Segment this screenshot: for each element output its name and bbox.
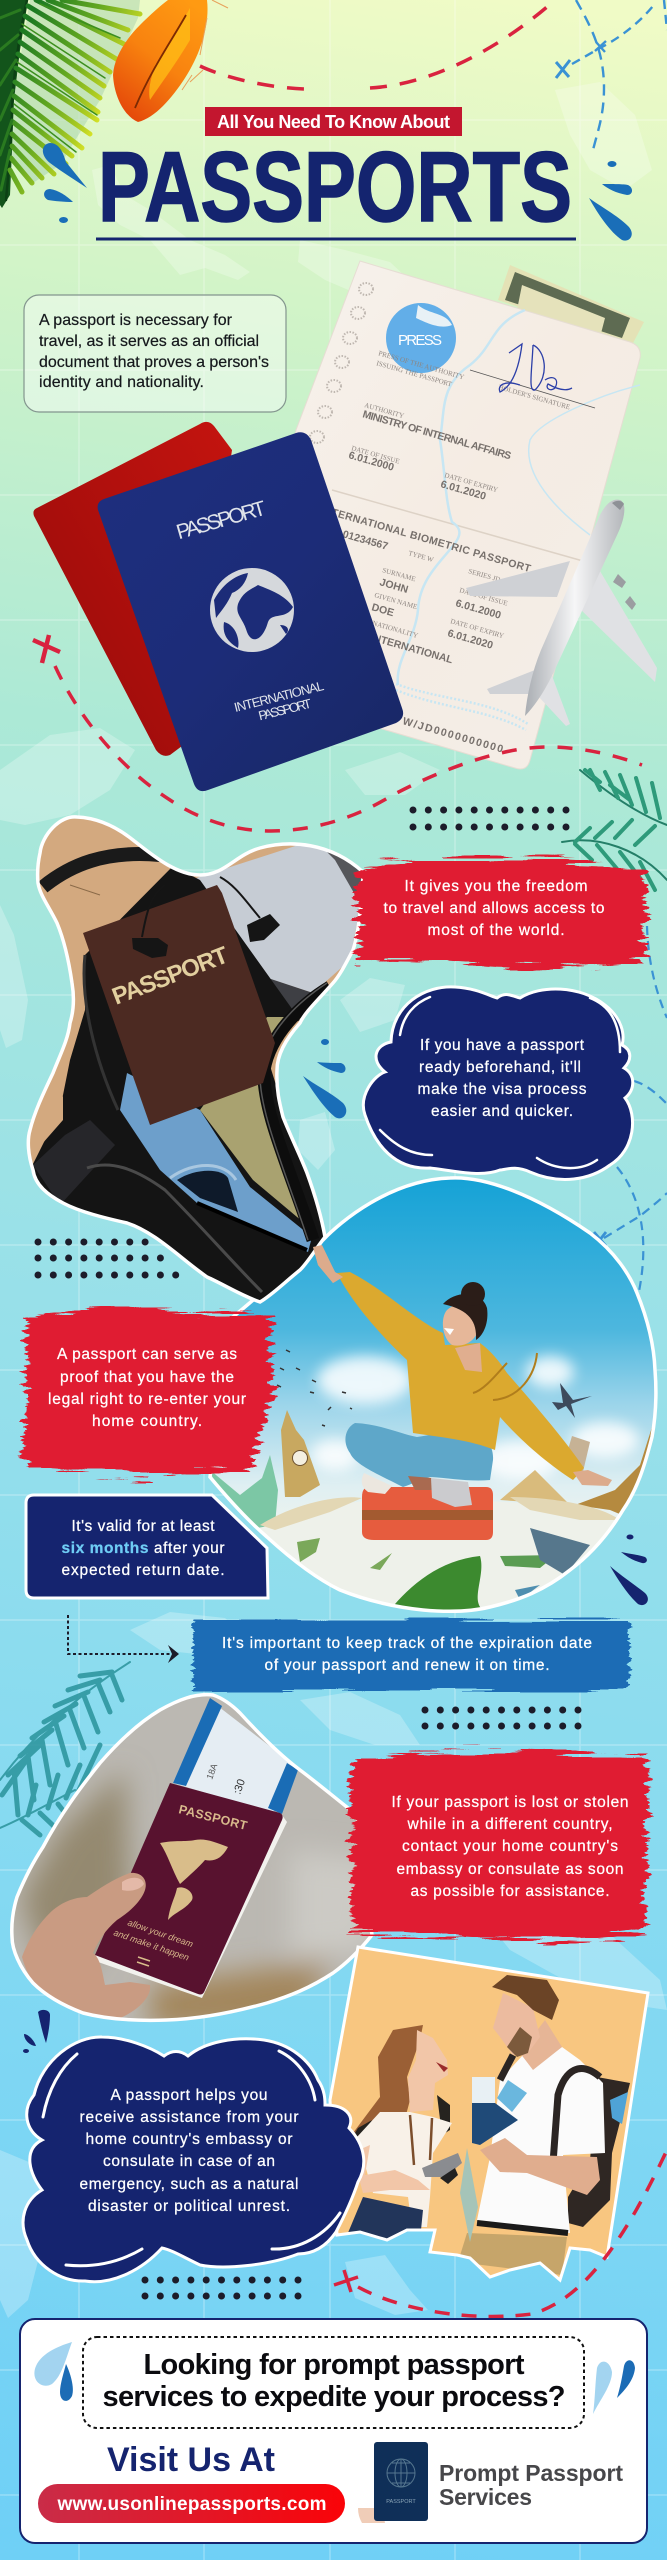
hands xyxy=(315,1254,343,1283)
callout: embassy assistance cloud: A passport helps you xyxy=(110,2087,268,2104)
passport printed details: 6.01.2020 xyxy=(439,478,488,503)
photo: hand holding maroon passport xyxy=(0,1690,380,2030)
icon: maroon passport xyxy=(95,1783,287,1998)
passport stamp: press globe xyxy=(386,303,456,373)
passport printed details: DOE xyxy=(370,601,395,619)
woman's jeans xyxy=(345,2197,423,2240)
passport printed details: AUTHORITY xyxy=(363,401,405,420)
blue dashed flight path top right xyxy=(556,0,667,150)
woman's hair xyxy=(353,2025,423,2143)
icon: airplane xyxy=(466,500,657,726)
passport page watermark rivers xyxy=(396,310,640,730)
logo: passport icon xyxy=(358,2442,428,2523)
icon: earphones xyxy=(132,877,280,958)
icon: silver globe xyxy=(210,568,294,652)
red X and dashed flight path lower xyxy=(33,635,642,831)
blue passport booklet: PASSPORT xyxy=(257,696,313,723)
blurred background tones xyxy=(20,1770,380,2030)
hand xyxy=(22,1873,150,2022)
blue passport booklet: PASSPORT xyxy=(174,497,269,544)
dots pattern mid right xyxy=(425,1710,580,1726)
passport printed details: SURNAME xyxy=(381,566,417,583)
dots pattern left xyxy=(38,1242,190,1275)
callout: visa process cloud xyxy=(363,987,633,1179)
icon: left quote drops xyxy=(34,2342,73,2401)
passport stamp: press globe: PRESS xyxy=(398,332,442,349)
callout: visa process cloud: If you have a passport xyxy=(420,1037,585,1054)
callout: lost or stolen xyxy=(350,1751,648,1940)
landmark: statue of liberty xyxy=(210,1455,278,1530)
logo: passport icon: PASSPORT xyxy=(386,2499,416,2505)
icon: leather passport: PASSPORT xyxy=(108,942,232,1011)
blue passport booklet: INTERNATIONAL xyxy=(232,678,325,715)
callout: embassy assistance cloud: receive assistance from your xyxy=(80,2109,298,2126)
photo: woman on suitcase over the globe xyxy=(190,1170,660,1620)
passport printed details: TYPE W xyxy=(407,549,435,564)
suitcase xyxy=(362,1487,493,1540)
passport printed details: ISSUING THE PASSPORT xyxy=(375,359,453,389)
icon: blue splash right xyxy=(589,161,632,241)
woman's face xyxy=(408,2030,448,2112)
logo: brand name: Services xyxy=(439,2484,532,2510)
icon: right quote drops xyxy=(593,2360,635,2414)
camera xyxy=(422,2153,462,2177)
passport printed details xyxy=(319,349,571,756)
callout: visa process cloud: easier and quicker. xyxy=(431,1103,573,1120)
icon: palm leaf lower left xyxy=(0,1662,130,1835)
passport printed details: W/JD0000000000 xyxy=(401,715,505,756)
man's shirt xyxy=(477,2047,605,2233)
icon: boarding pass: 18A xyxy=(204,1762,219,1781)
title ribbon: All You Need To Know About xyxy=(217,112,450,132)
text box: intro: document that proves a person's xyxy=(39,354,269,371)
passport printed details: SERIES JD xyxy=(467,567,501,584)
photo: happy travel couple xyxy=(325,1940,655,2290)
passport printed details: 6.01.2000 xyxy=(347,449,396,474)
earth xyxy=(264,1502,520,1527)
woman's shirt xyxy=(357,2112,452,2227)
laptop xyxy=(196,846,360,992)
callout: expiration banner xyxy=(193,1620,629,1690)
woman's arm xyxy=(352,2145,430,2193)
callout: lost or stolen: If your passport is lost or stolen xyxy=(392,1794,628,1811)
red X and dashed flight path bottom xyxy=(334,2150,667,2316)
icon: palm leaf top left xyxy=(0,0,140,208)
text box: intro: identity and nationality. xyxy=(39,374,204,391)
callout: visa process cloud: ready beforehand, it'll xyxy=(419,1059,581,1076)
icon: navy splash right xyxy=(610,1534,648,1605)
passport printed details: NATIONALITY xyxy=(371,619,419,640)
head xyxy=(443,1282,487,1372)
passport printed details: DATE OF ISSUE xyxy=(350,444,401,466)
logo: brand name: Prompt Passport xyxy=(439,2460,623,2486)
passport printed details: PRESS OF THE AUTHORITY xyxy=(377,349,465,381)
dotted question box: services to expedite your process? xyxy=(102,2381,566,2413)
callout: expiration banner: It's important to keep track of the expiration date xyxy=(222,1635,592,1652)
dotted question box xyxy=(83,2337,584,2428)
passport printed details: INTERNATIONAL BIOMETRIC PASSPORT xyxy=(319,503,533,575)
jeans xyxy=(120,1073,312,1252)
callout: lost or stolen: embassy or consulate as soon xyxy=(396,1861,624,1878)
dots pattern top right xyxy=(413,810,570,827)
website pill xyxy=(38,2484,345,2523)
icon: leather passport xyxy=(83,885,275,1125)
icon: navy splash above cloud xyxy=(23,2010,50,2053)
icon: banknotes xyxy=(498,265,644,345)
icon: flock of birds xyxy=(277,1350,352,1426)
callout: lost or stolen: contact your home country's xyxy=(402,1838,618,1855)
landmark: pyramids xyxy=(500,1470,567,1502)
photo: leather passport in bag xyxy=(20,800,370,1310)
icon: maroon passport: PASSPORT xyxy=(177,1802,249,1833)
map xyxy=(460,2148,478,2242)
bag strap xyxy=(43,854,160,887)
red passport booklet xyxy=(33,422,232,756)
icon: palm leaf right xyxy=(562,770,667,890)
passport printed details: HOLDER'S SIGNATURE xyxy=(497,383,571,411)
callout: valid six months: It's valid for at least xyxy=(72,1518,215,1535)
callout: lost or stolen: while in a different country, xyxy=(406,1816,612,1833)
man's trousers xyxy=(458,2233,567,2275)
backpack straps xyxy=(500,2055,600,2163)
callout: freedom to travel: most of the world. xyxy=(428,922,564,939)
landmark: eiffel tower xyxy=(575,1427,652,1515)
text box: intro: A passport is necessary for xyxy=(39,312,233,329)
callout: valid six months: expected return date. xyxy=(62,1562,224,1579)
callout: visa process cloud: make the visa process xyxy=(418,1081,587,1098)
passport printed details: INTERNATIONAL xyxy=(369,631,455,666)
callout: embassy assistance cloud xyxy=(23,2037,364,2282)
bag rim and folds xyxy=(264,987,330,1240)
callout: proof to re-enter: legal right to re-enter your xyxy=(48,1391,246,1408)
blue splash near bag xyxy=(303,1039,346,1118)
open passport document xyxy=(250,261,640,769)
passport printed details: 6.01.2000 xyxy=(454,597,503,622)
callout: valid six months: six months after your xyxy=(62,1540,224,1557)
dotted question box: Looking for prompt passport xyxy=(144,2349,525,2381)
passport page stamp holes xyxy=(310,283,373,443)
passport printed details: 6.01.2020 xyxy=(446,627,495,652)
visit us heading: Visit Us At xyxy=(107,2441,275,2479)
callout: embassy assistance cloud: consulate in case of an xyxy=(103,2153,275,2170)
jeans xyxy=(345,1423,493,1487)
icon: small airplane xyxy=(552,1383,592,1418)
dots pattern bottom xyxy=(145,2280,302,2296)
blue dashed flight path mid right xyxy=(594,926,667,1305)
woman's backpack straps xyxy=(345,2095,450,2150)
callout: freedom to travel: It gives you the freedom xyxy=(404,878,588,895)
woman's reaching hand xyxy=(313,1245,343,1283)
passport printed details: JOHN xyxy=(378,576,410,596)
callout: embassy assistance cloud: disaster or political unrest. xyxy=(88,2198,290,2215)
icon: maroon passport: allow your dream xyxy=(126,1917,195,1949)
callout: embassy assistance cloud: home country's embassy or xyxy=(86,2131,292,2148)
man's arm xyxy=(480,2138,600,2195)
passport printed details: GIVEN NAME xyxy=(373,591,418,611)
man's neck and head xyxy=(520,2020,562,2070)
passport printed details: 01234567 xyxy=(341,528,390,553)
landmark: pisa tower xyxy=(568,1436,590,1471)
olive cloth xyxy=(200,1017,303,1222)
clouds xyxy=(311,1356,639,1480)
icon: boarding pass: :30 xyxy=(232,1778,248,1796)
icon: orange feather xyxy=(113,0,228,122)
callout: valid six months xyxy=(26,1495,268,1598)
callout: lost or stolen: as possible for assistance. xyxy=(410,1883,610,1900)
man's backpack xyxy=(568,2077,630,2227)
callout: freedom to travel: to travel and allows access to xyxy=(384,900,604,917)
callout: proof to re-enter: A passport can serve as xyxy=(57,1346,237,1363)
title ribbon xyxy=(205,107,462,136)
bag body xyxy=(30,866,330,1310)
blue passport booklet xyxy=(98,432,403,791)
icon: maroon passport: and make it happen xyxy=(112,1927,190,1963)
text box: intro: travel, as it serves as an official xyxy=(39,333,259,350)
website pill: www.usonlinepassports.com xyxy=(56,2494,326,2515)
dotted arrow xyxy=(68,1615,179,1663)
tickets and passport xyxy=(472,2077,495,2103)
passport printed details: DATE OF ISSUE xyxy=(458,586,509,608)
callout: proof to re-enter: proof that you have the xyxy=(60,1369,234,1386)
footer call to action card xyxy=(20,2319,647,2543)
callout: expiration banner: of your passport and renew it on time. xyxy=(264,1657,550,1674)
red dashed flight path top xyxy=(200,0,555,89)
passport printed details: DATE OF EXPIRY xyxy=(443,471,499,494)
icon: blue splash left xyxy=(43,143,87,223)
icon: boarding pass xyxy=(173,1698,298,1814)
text box: intro xyxy=(24,295,286,412)
callout: proof to re-enter: home country. xyxy=(92,1413,202,1430)
logo: brand name xyxy=(439,2460,623,2510)
hoodie xyxy=(337,1272,584,1480)
callout: proof to re-enter xyxy=(24,1309,272,1476)
callout: freedom to travel xyxy=(356,859,646,967)
passport printed details: MINISTRY OF INTERNAL AFFAIRS xyxy=(361,408,513,462)
landmark: clock tower xyxy=(281,1410,320,1497)
callout: embassy assistance cloud: emergency, such as a natural xyxy=(80,2176,298,2193)
passport signature xyxy=(470,344,595,408)
passport printed details: DATE OF EXPIRY xyxy=(449,617,505,640)
